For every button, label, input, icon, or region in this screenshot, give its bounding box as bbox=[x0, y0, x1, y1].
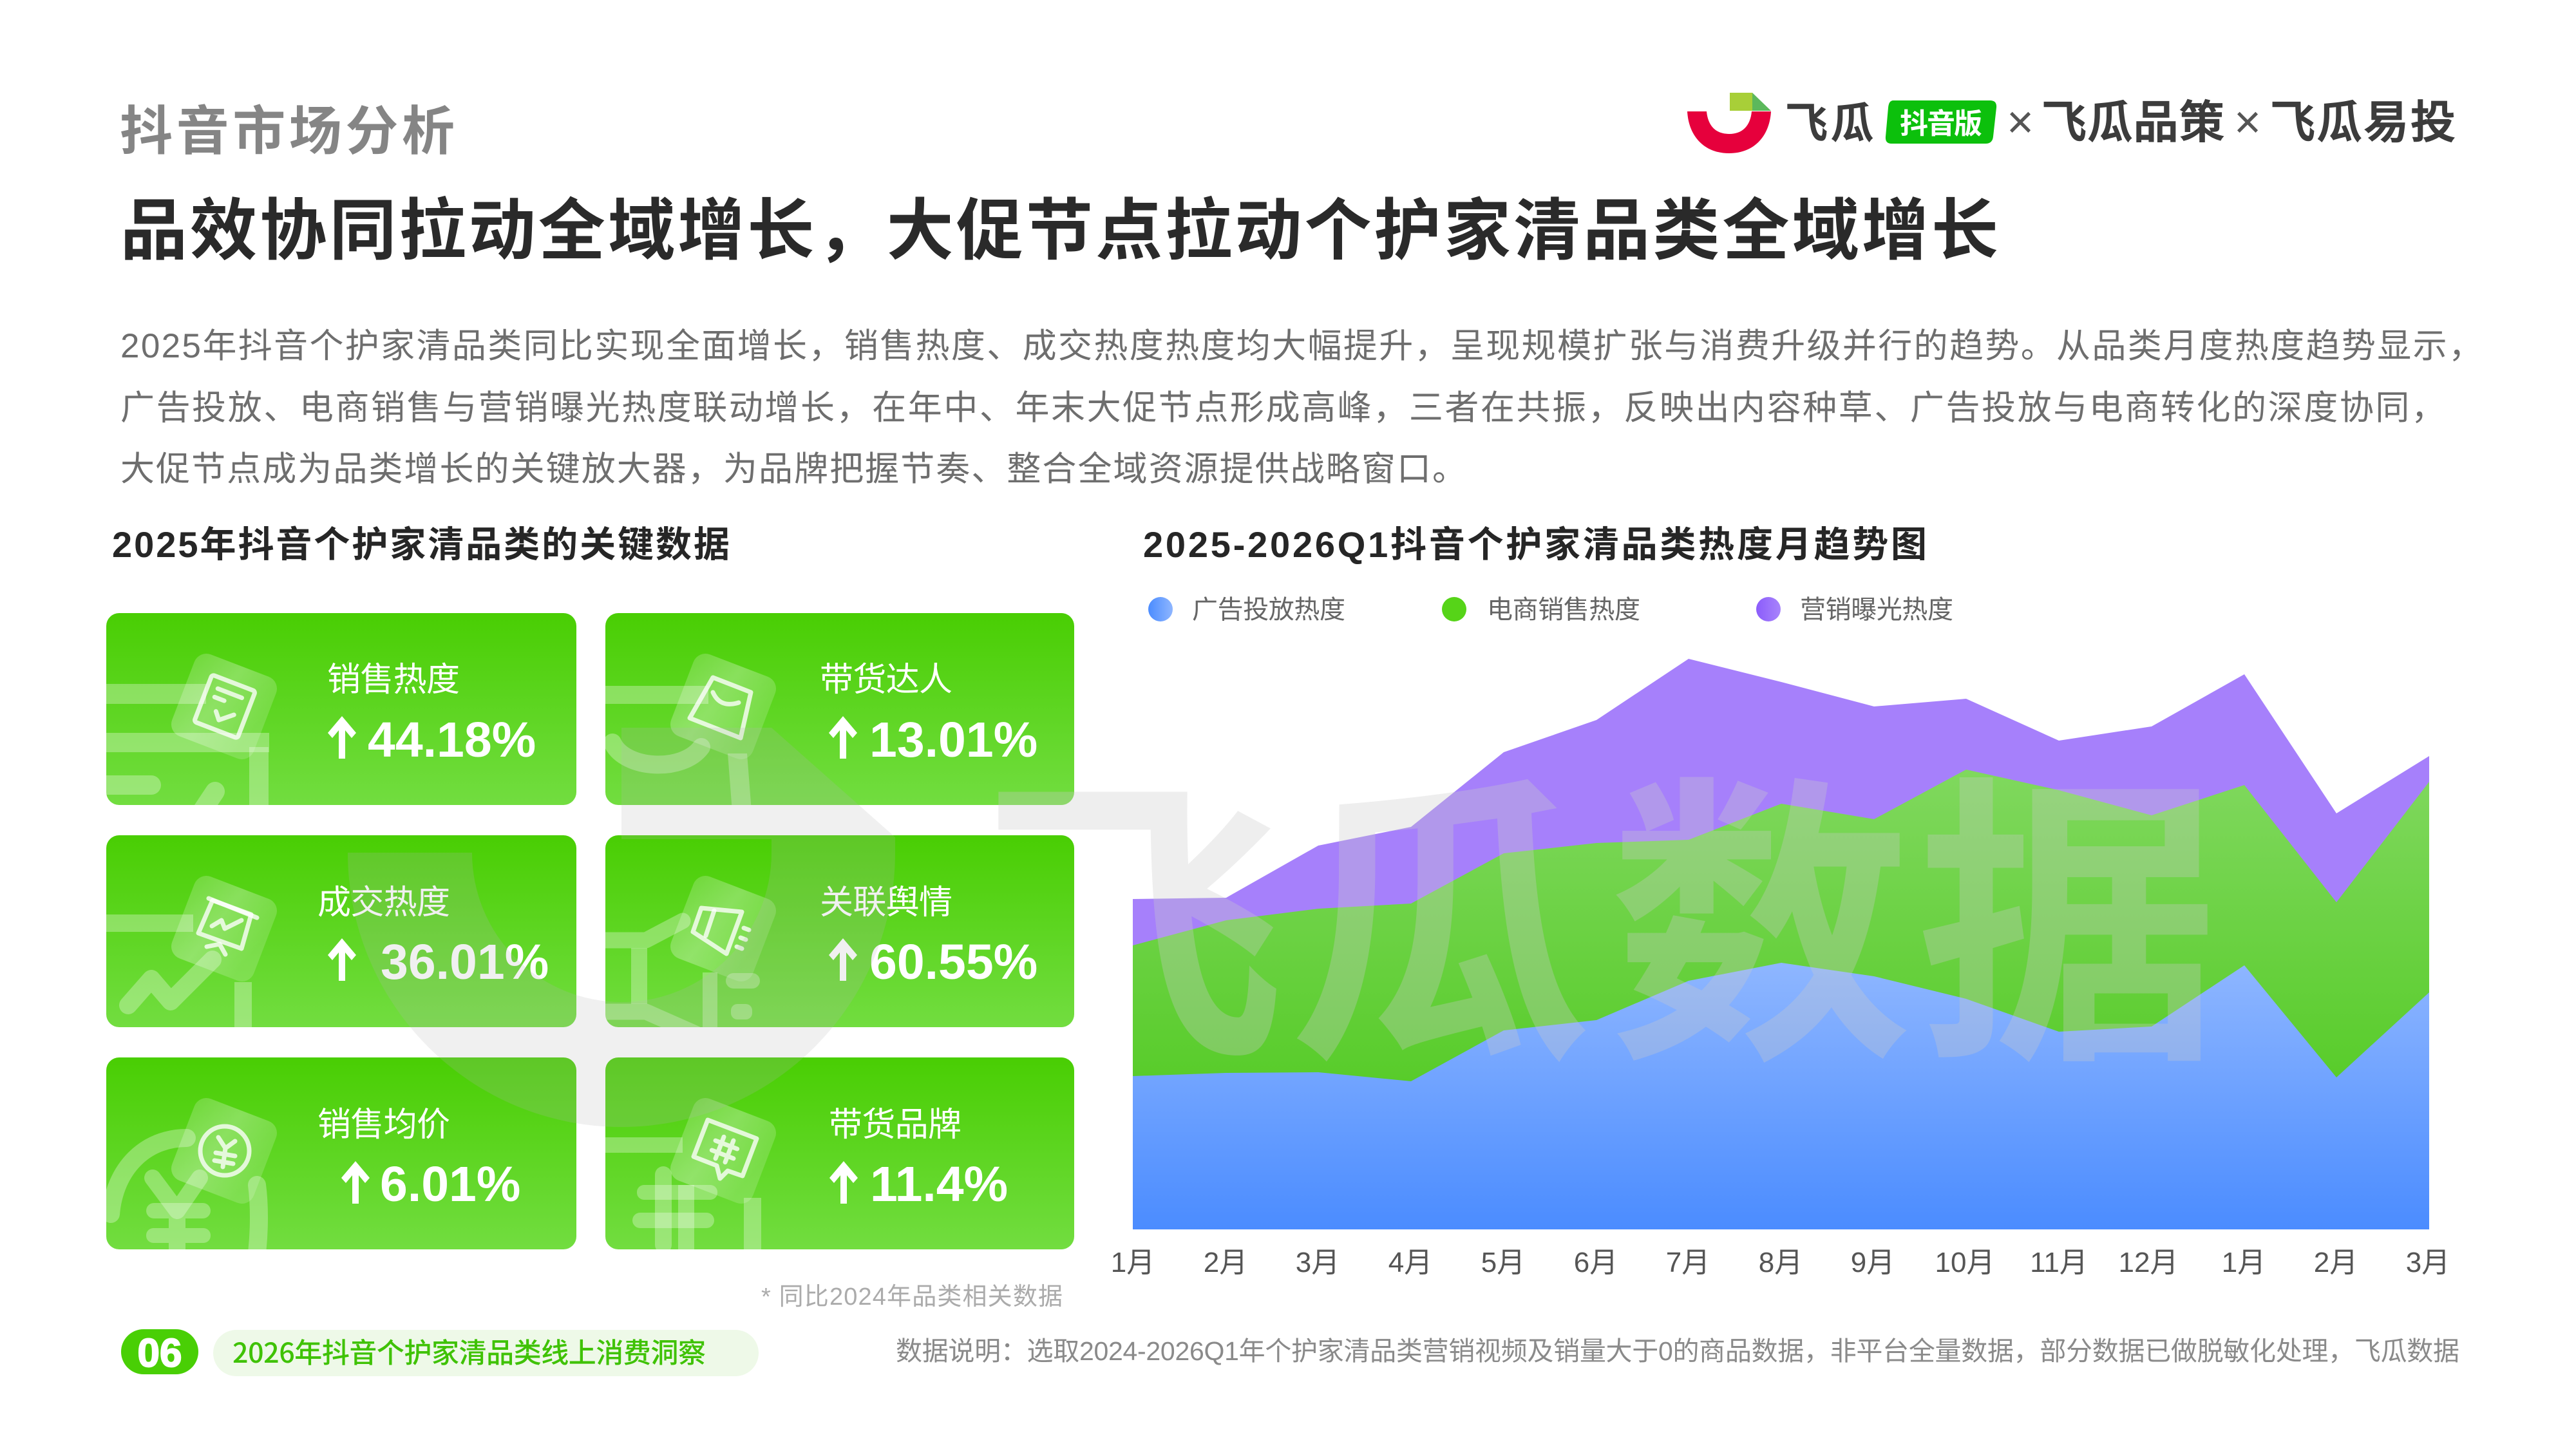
area: 营销曝光热度 bbox=[1133, 659, 2429, 1229]
label: 带货达人 bbox=[820, 652, 952, 701]
card: 成交热度 bbox=[97, 835, 576, 1030]
icon: megaphone bbox=[693, 908, 749, 954]
card: 带货品牌 bbox=[599, 1057, 1074, 1253]
label: 带货品牌 bbox=[829, 1097, 961, 1146]
label: 关联舆情 bbox=[820, 875, 952, 923]
footer section pill bbox=[121, 1329, 759, 1376]
chart legend: 营销曝光热度 bbox=[1800, 596, 1953, 624]
area: 电商销售热度 bbox=[1133, 770, 2429, 1229]
value: 13.01% bbox=[869, 712, 1037, 768]
value: 60.55% bbox=[869, 934, 1037, 990]
label: 销售均价 bbox=[317, 1097, 450, 1146]
x axis labels: 5月 bbox=[1481, 1247, 1525, 1278]
logo text: 飞瓜易投: 飞瓜易投 bbox=[2270, 86, 2456, 151]
x axis labels: 6月 bbox=[1574, 1247, 1618, 1278]
logo text: 飞瓜: 飞瓜 bbox=[1785, 89, 1873, 151]
icon: up arrow bbox=[328, 938, 356, 981]
icon: up arrow bbox=[829, 716, 857, 759]
watermark: 飞瓜数据: 飞瓜数据 bbox=[982, 684, 2219, 1122]
label: 销售热度 bbox=[327, 652, 460, 701]
intro paragraph: 2025年抖音个护家清品类同比实现全面增长，销售热度、成交热度热度均大幅提升，呈现规模扩张与消费升级并行的趋势。从品类月度热度趋势显示， bbox=[120, 327, 2483, 365]
icon: shopping bag bbox=[690, 677, 751, 738]
x axis labels: 2月 bbox=[1204, 1247, 1247, 1278]
icon: 飞瓜 logo mark bbox=[1687, 93, 1771, 153]
intro paragraph: 广告投放、电商销售与营销曝光热度联动增长，在年中、年末大促节点形成高峰，三者在共振，反映出内容种草、广告投放与电商转化的深度协同， bbox=[120, 389, 2445, 427]
badge: 06: 06 bbox=[138, 1331, 182, 1376]
intro paragraph: 大促节点成为品类增长的关键放大器，为品牌把握节奏、整合全域资源提供战略窗口。 bbox=[120, 450, 1466, 488]
multiply sign: × bbox=[2234, 97, 2261, 148]
card: 带货达人 bbox=[599, 613, 1074, 811]
card: 销售均价 bbox=[106, 1057, 576, 1253]
x axis labels: 10月 bbox=[1935, 1247, 1994, 1278]
heading: key data: 2025年抖音个护家清品类的关键数据 bbox=[112, 524, 730, 565]
x axis labels: 3月 bbox=[1296, 1247, 1340, 1278]
x axis labels: 9月 bbox=[1851, 1247, 1895, 1278]
logo group: 飞瓜抖音版 × 飞瓜品策 × 飞瓜易投 bbox=[1687, 86, 2456, 153]
icon: up arrow bbox=[829, 938, 857, 981]
chapter label: 2026年抖音个护家清品类线上消费洞察 bbox=[232, 1331, 706, 1371]
title: 品效协同拉动全域增长，大促节点拉动个护家清品类全域增长 bbox=[120, 176, 1998, 273]
icon: up arrow bbox=[328, 716, 356, 759]
heading: trend chart: 2025-2026Q1抖音个护家清品类热度月趋势图 bbox=[1143, 524, 1927, 565]
x axis labels: 1月 bbox=[1111, 1247, 1155, 1278]
chart legend: 广告投放热度 bbox=[1192, 596, 1345, 624]
x axis labels: 1月 bbox=[2222, 1247, 2266, 1278]
icon: yen coin bbox=[200, 1126, 249, 1175]
value: 6.01% bbox=[380, 1157, 520, 1212]
data source note: 数据说明：选取2024-2026Q1年个护家清品类营销视频及销量大于0的商品数据，非平台全量数据，部分数据已做脱敏化处理，飞瓜数据 bbox=[896, 1336, 2459, 1366]
multiply sign: × bbox=[2007, 97, 2034, 148]
value: 36.01% bbox=[381, 934, 549, 990]
intro paragraph bbox=[120, 327, 2483, 488]
icon: up arrow bbox=[829, 1161, 858, 1204]
icon: checklist document bbox=[194, 675, 256, 738]
chart legend: 电商销售热度 bbox=[1487, 596, 1640, 624]
icon: hashtag speech bubble bbox=[694, 1120, 757, 1179]
area chart bbox=[1111, 659, 2450, 1278]
icon: up arrow bbox=[341, 1161, 370, 1204]
watermark: logo mark bbox=[348, 728, 895, 1127]
x axis labels: 8月 bbox=[1759, 1247, 1803, 1278]
x axis labels: 7月 bbox=[1666, 1247, 1710, 1278]
chart legend bbox=[1148, 596, 1953, 624]
card: 关联舆情 bbox=[599, 835, 1074, 1034]
footnote: * 同比2024年品类相关数据 bbox=[761, 1283, 1063, 1311]
x axis labels: 4月 bbox=[1388, 1247, 1432, 1278]
x axis labels: 3月 bbox=[2406, 1247, 2450, 1278]
x axis labels: 11月 bbox=[2030, 1247, 2088, 1278]
value: 11.4% bbox=[870, 1157, 1008, 1212]
badge: 06 bbox=[121, 1329, 198, 1376]
section label: 抖音市场分析: 抖音市场分析 bbox=[120, 88, 455, 165]
value: 44.18% bbox=[368, 712, 536, 768]
x axis labels bbox=[1111, 1247, 2450, 1278]
area: 广告投放热度 bbox=[1133, 963, 2429, 1229]
card: 销售热度 bbox=[106, 613, 576, 805]
icon: presentation board bbox=[198, 898, 257, 954]
x axis labels: 12月 bbox=[2119, 1247, 2178, 1278]
panel: KPI cards bbox=[97, 613, 1074, 1253]
logo text: 飞瓜品策: 飞瓜品策 bbox=[2041, 86, 2224, 151]
badge: 抖音版: 抖音版 bbox=[1900, 100, 1982, 142]
x axis labels: 2月 bbox=[2314, 1247, 2358, 1278]
label: 成交热度 bbox=[317, 875, 450, 923]
